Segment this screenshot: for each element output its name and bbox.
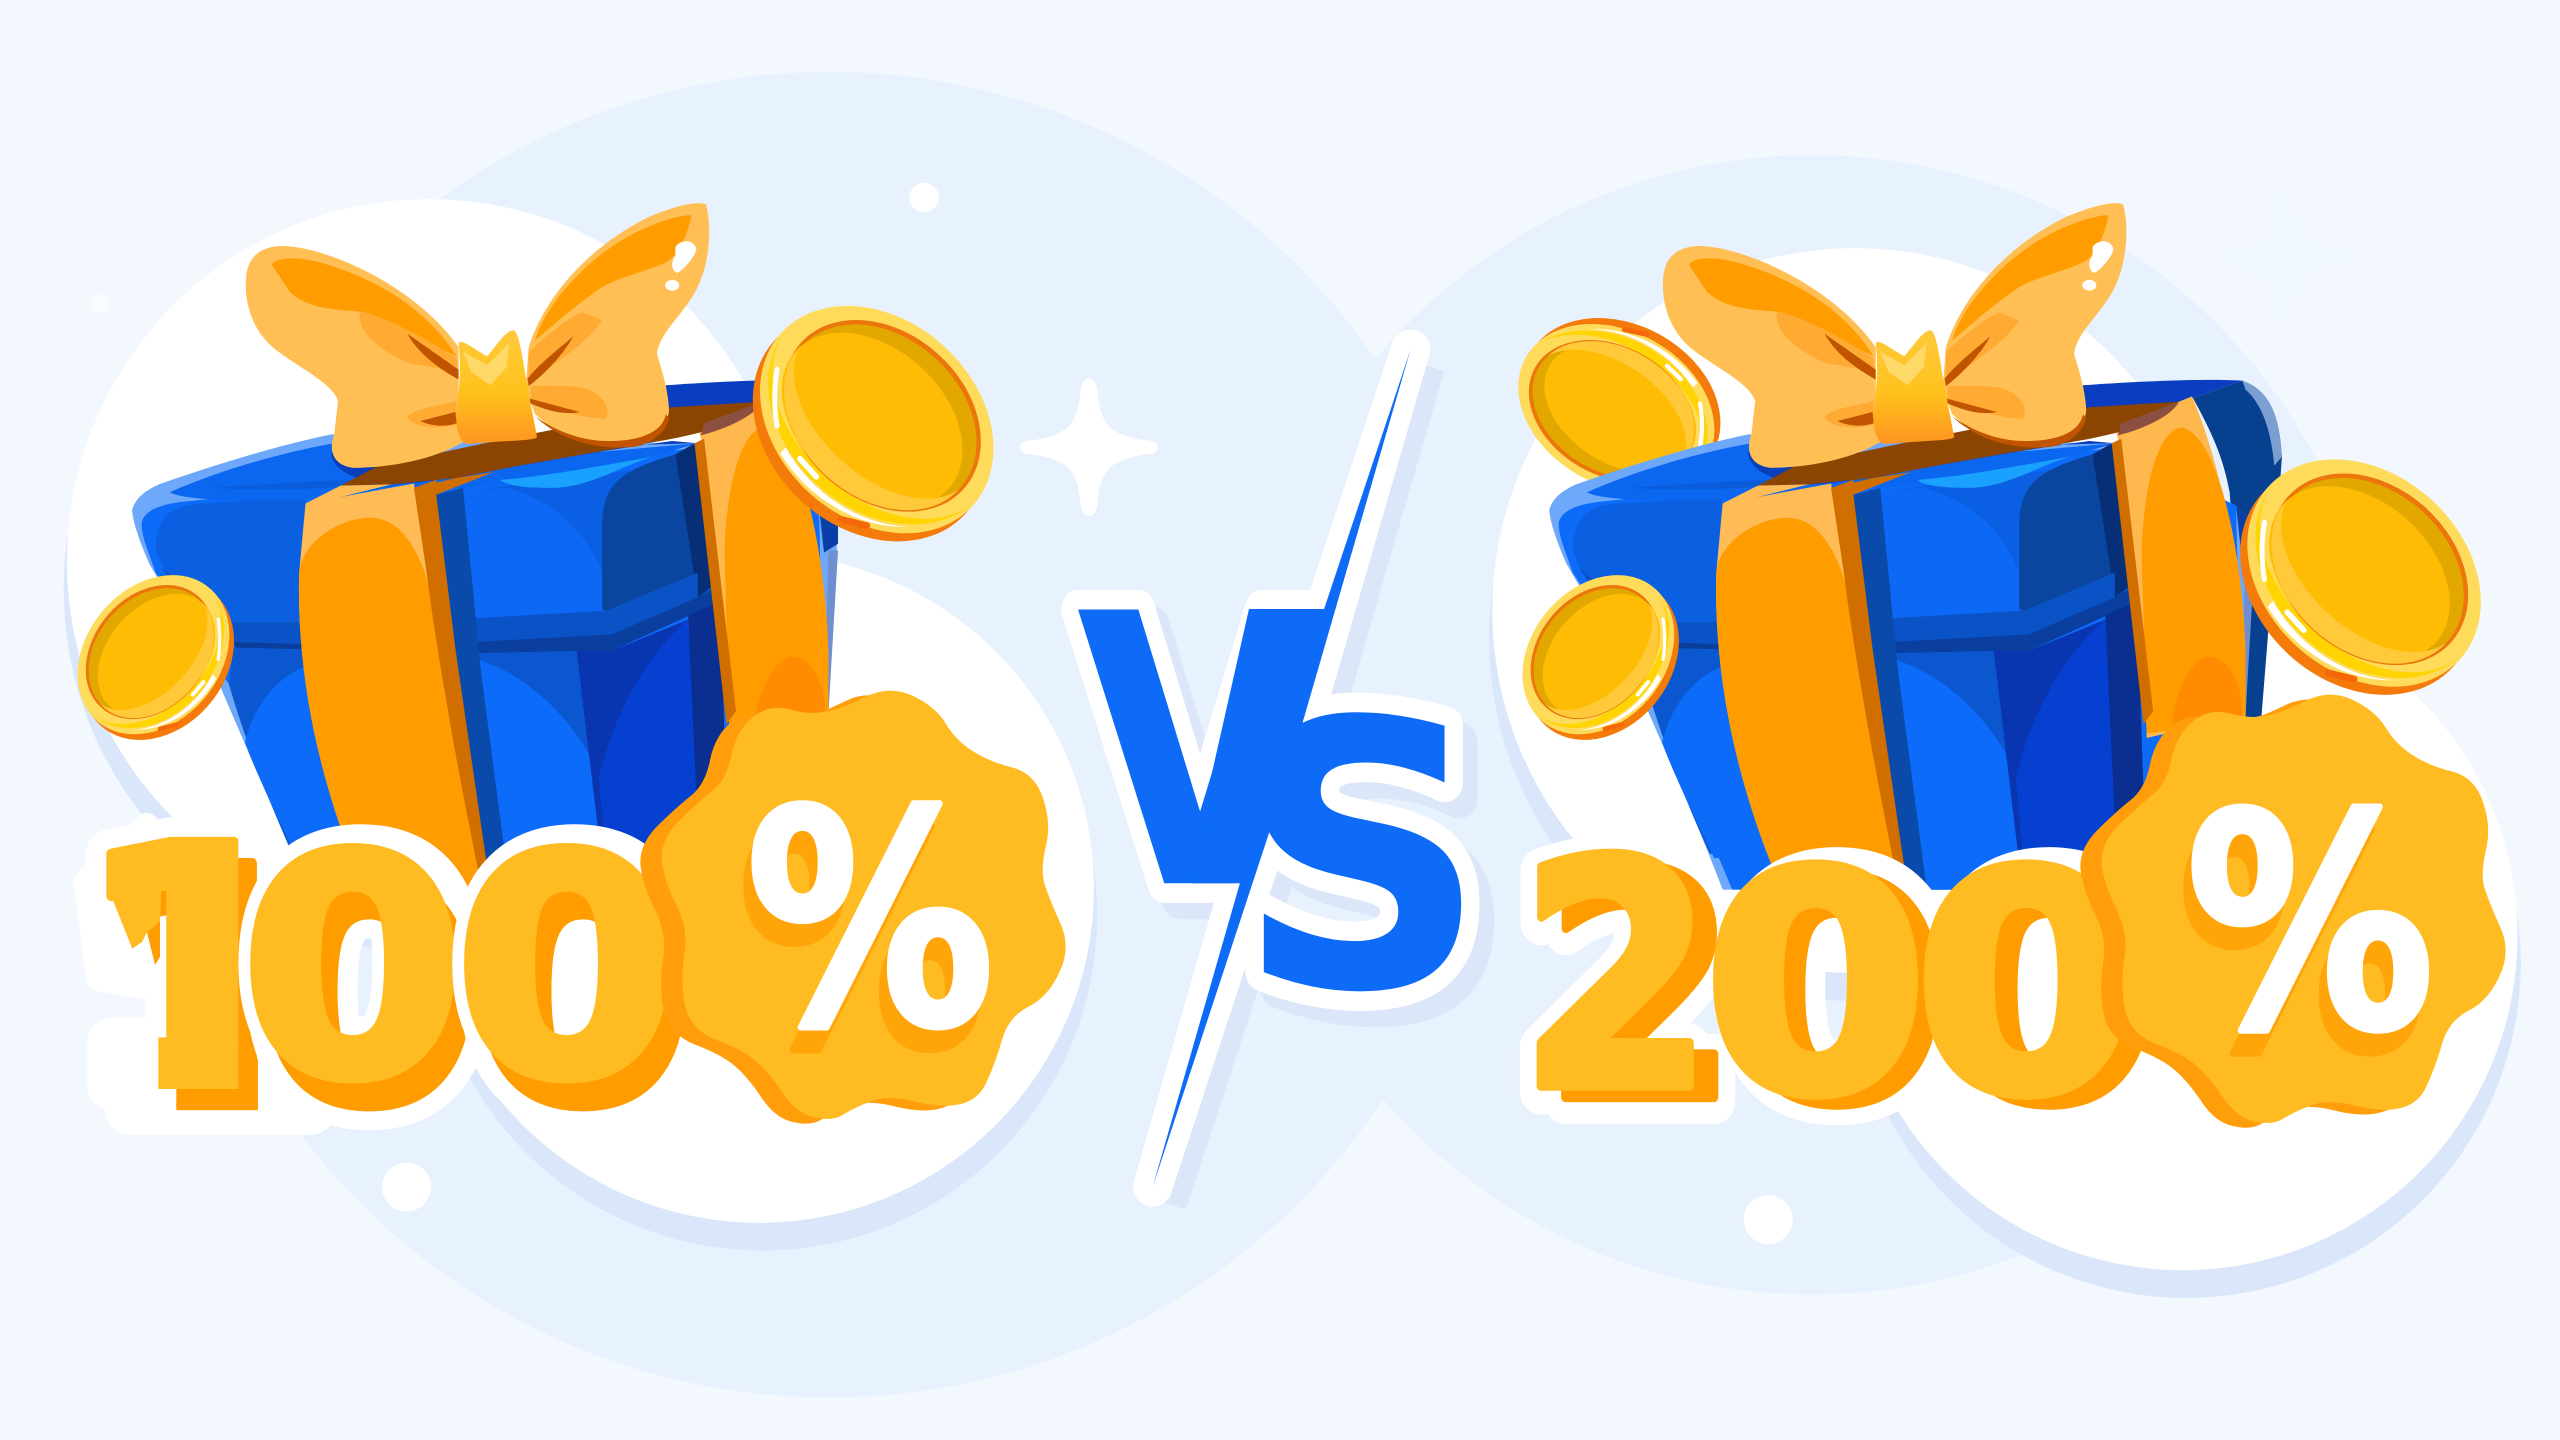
background circle: right <box>1242 155 2382 1295</box>
right gift group <box>1480 203 2282 890</box>
right coin: large <box>2194 413 2527 742</box>
left white backdrop <box>64 199 1097 1251</box>
digit 0: 0 <box>240 792 466 1147</box>
right white backdrop <box>1489 248 2521 1298</box>
VS shadow: S <box>1251 661 1501 1090</box>
VS letters: S <box>1237 645 1487 1074</box>
percent badge <box>640 691 1066 1124</box>
digit 2: 2 <box>1543 811 1739 1175</box>
digit 2: 2 <box>1519 796 1714 1161</box>
digit 1: 1 <box>90 796 334 1186</box>
digit 0: 0 <box>470 819 696 1175</box>
percent sign: % <box>2186 753 2434 1097</box>
digit 0: 0 <box>470 819 696 1175</box>
percent sign: % <box>2178 776 2426 1120</box>
digit 2: 2 <box>1543 808 1739 1172</box>
right percentage 200% <box>1519 695 2506 1175</box>
digit 2: 2 <box>1519 801 1714 1166</box>
left coin: large <box>707 259 1039 588</box>
percent sign: % <box>738 773 986 1116</box>
VS white outline: V <box>1076 536 1326 973</box>
digit 0: 0 <box>248 792 474 1147</box>
left percentage 100% <box>74 690 1066 1135</box>
decorative dots <box>90 183 1793 1244</box>
digit 0: 0 <box>462 792 688 1147</box>
left gift box <box>132 203 838 890</box>
sparkle: centre left <box>1020 379 1158 516</box>
digit 0: 0 <box>1936 814 2162 1170</box>
right coin: small <box>1493 542 1709 773</box>
sparkle: top right <box>2217 189 2354 327</box>
digit 0: 0 <box>256 819 482 1175</box>
digit 0: 0 <box>256 819 482 1175</box>
VS emblem <box>1076 349 1501 1203</box>
digit 0: 0 <box>1703 808 1928 1164</box>
background circle: left <box>167 72 1492 1398</box>
VS letters: V <box>1076 536 1326 973</box>
lightning slash: bottom <box>1153 824 1272 1187</box>
VS shadow <box>1091 366 1501 1203</box>
right gift box back panel <box>2179 381 2282 720</box>
VS white outline: S <box>1237 645 1487 1074</box>
digit 1: 1 <box>72 775 316 1165</box>
digit 0: 0 <box>1913 808 2139 1164</box>
lightning slash: top <box>1192 349 1411 883</box>
digit 0: 0 <box>1936 818 2162 1173</box>
VS letters <box>1076 349 1487 1187</box>
right gift box <box>1549 203 2255 890</box>
left coin: small <box>48 542 264 773</box>
VS shadow: V <box>1091 553 1341 989</box>
digit 1: 1 <box>90 799 334 1189</box>
digit 0: 0 <box>1724 818 1950 1173</box>
digit 1: 1 <box>72 775 316 1165</box>
percent badge <box>2080 695 2506 1128</box>
digit 0: 0 <box>454 792 680 1147</box>
percent sign: % <box>746 750 994 1094</box>
digit 0: 0 <box>1724 814 1950 1170</box>
VS white outline <box>1076 349 1487 1187</box>
right coin: behind box <box>1480 283 1759 527</box>
